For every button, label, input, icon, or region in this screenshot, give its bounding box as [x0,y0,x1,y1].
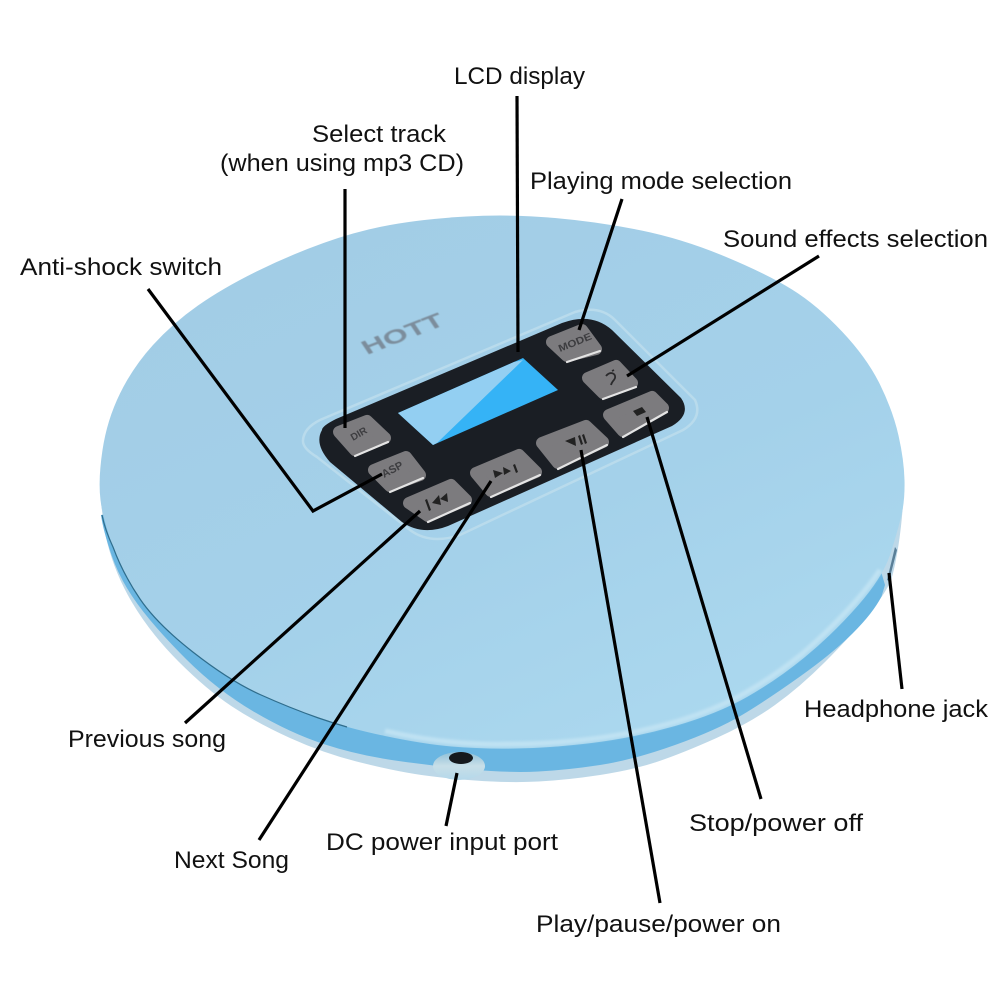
line: anti-shock [148,289,382,511]
label: DC power input port: DC power input port [326,829,558,856]
player disc [100,216,905,782]
button: stop [609,397,667,437]
line: playing mode [579,199,622,330]
disc base edge [100,490,904,782]
line: DC power [446,773,457,826]
label: when using mp3 CD: (when using mp3 CD) [220,150,464,177]
label: LCD display: LCD display [454,63,585,90]
line: next [259,481,491,840]
label: Play/pause/power on: Play/pause/power on [536,911,781,938]
control panel [319,319,685,530]
label: Anti-shock switch: Anti-shock switch [20,254,222,281]
button: DIR [339,421,388,456]
icon: ear [606,370,615,385]
button: mode: MODE [557,331,594,355]
headphone jack slot [887,547,897,581]
button: play/pause [542,426,607,469]
button: sound effects [588,366,636,399]
button: mode [552,330,600,362]
icon: next [493,464,518,478]
DC power port [433,752,485,780]
highlight rim [385,570,880,744]
label: Previous song: Previous song [68,726,226,753]
button: ASP [374,457,423,492]
button: next [476,455,540,497]
label: Playing mode selection: Playing mode selection [530,168,792,195]
disc top surface [100,216,905,749]
dark seam line [102,515,347,727]
line: LCD display [517,96,518,352]
label: Headphone jack: Headphone jack [804,696,989,723]
icon: stop [633,407,646,416]
icon: previous [425,493,448,511]
button: DIR: DIR [349,425,370,444]
button: ASP: ASP [380,459,405,481]
label: Sound effects selection: Sound effects selection [723,226,988,253]
line: sound effects [627,256,819,376]
label: Select track: Select track [312,121,447,148]
line: previous [185,511,420,723]
label: Stop/power off: Stop/power off [689,810,863,837]
LCD display [398,358,558,445]
line: headphone [889,573,902,689]
control recess outline [303,310,697,539]
blue side band [101,500,885,772]
button: previous [409,485,470,522]
leader lines [148,96,902,903]
line: select track [343,189,347,428]
icon: play pause [565,434,587,446]
line: play/pause [581,450,660,903]
brand logo: HOTT [356,308,449,359]
line: stop [647,417,761,799]
label: Next Song: Next Song [174,847,289,874]
